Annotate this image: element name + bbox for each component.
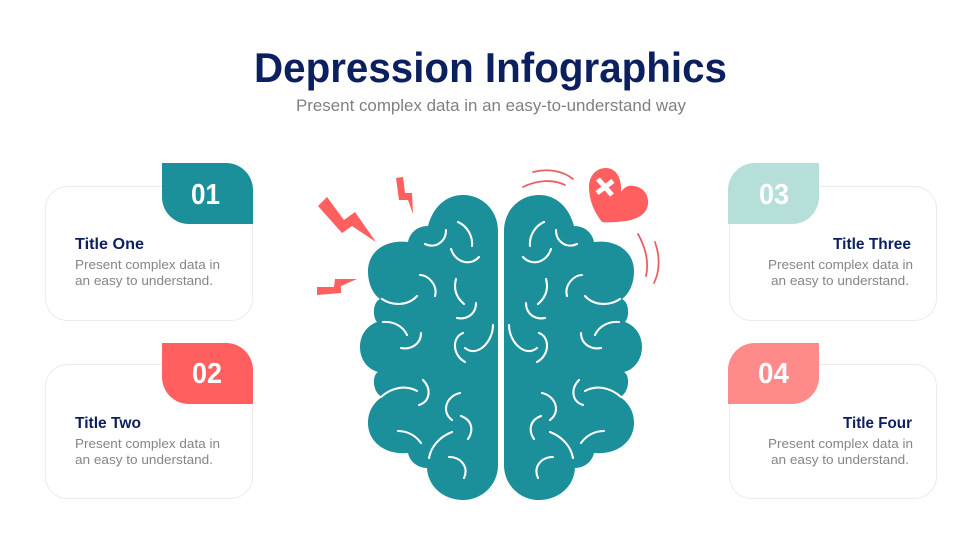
card two text: an easy to understand. <box>75 452 213 467</box>
number tab 02: 02 <box>192 358 222 390</box>
number tab 04: 04 <box>758 358 789 390</box>
number tab 04 <box>728 343 819 404</box>
card two text <box>75 436 220 467</box>
icon: broken heart with cross <box>589 168 648 222</box>
card four text <box>768 436 913 467</box>
brain illustration <box>360 195 642 500</box>
card four heading: Title Four <box>843 415 912 432</box>
icon: motion arcs beside the heart <box>638 234 659 283</box>
number tab 03 <box>728 163 819 224</box>
card three heading: Title Three <box>833 236 911 253</box>
subtitle: Present complex data in an easy-to-understand way <box>296 96 686 115</box>
panel: card three <box>728 163 936 320</box>
number tab 01: 01 <box>191 179 220 211</box>
card one text: Present complex data in <box>75 257 220 272</box>
brain right hemisphere <box>504 195 642 500</box>
card three text <box>768 257 913 288</box>
number tab 03: 03 <box>759 179 789 211</box>
card two heading: Title Two <box>75 415 141 432</box>
card four text: Present complex data in <box>768 436 913 451</box>
card four text: an easy to understand. <box>771 452 909 467</box>
card two text: Present complex data in <box>75 436 220 451</box>
number tab 01 <box>162 163 253 224</box>
icon: motion arcs above the heart <box>523 170 573 187</box>
card three text: an easy to understand. <box>771 273 909 288</box>
panel: card two <box>46 343 253 498</box>
title: Depression Infographics <box>254 44 727 91</box>
brain left hemisphere <box>360 195 498 500</box>
icon: top lightning bolt <box>396 177 413 214</box>
number tab 02 <box>162 343 253 404</box>
card one text <box>75 257 220 288</box>
panel: card one <box>46 163 253 320</box>
panel: card four <box>728 343 936 498</box>
card one heading: Title One <box>75 236 144 253</box>
card one text: an easy to understand. <box>75 273 213 288</box>
card three text: Present complex data in <box>768 257 913 272</box>
icon: large lightning bolt <box>318 197 376 242</box>
icon: lower lightning bolt <box>317 279 357 295</box>
